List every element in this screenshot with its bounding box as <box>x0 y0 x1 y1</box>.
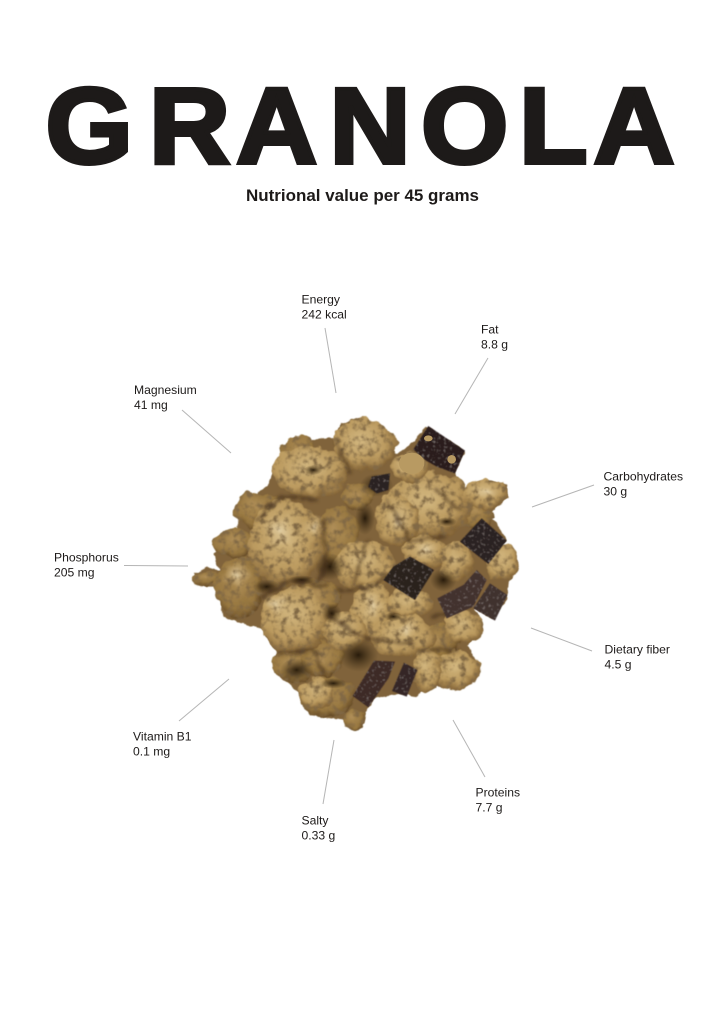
label: proteins: Proteins <box>476 786 520 800</box>
label: vitamin B1: Vitamin B1 <box>133 730 192 744</box>
label: proteins <box>453 720 520 814</box>
label: energy: 242 kcal <box>302 308 347 322</box>
title: GRANOLA <box>46 66 675 187</box>
label: phosphorus <box>54 550 188 580</box>
shadowed base of the cluster <box>193 419 518 730</box>
label: dietary fiber: 4.5 g <box>604 658 632 672</box>
label: salty: Salty <box>302 814 329 828</box>
label: energy: Energy <box>302 292 341 306</box>
label: energy <box>302 292 347 393</box>
chocolate pieces <box>353 426 507 707</box>
label: phosphorus: Phosphorus <box>54 550 119 564</box>
label: carbohydrates: 30 g <box>604 484 627 498</box>
label: magnesium <box>134 383 231 453</box>
label: dietary fiber: Dietary fiber <box>604 642 670 656</box>
label: salty: 0.33 g <box>302 828 335 842</box>
dark gaps between clumps <box>253 465 457 689</box>
label: proteins: 7.7 g <box>476 800 503 814</box>
label: salty <box>302 740 335 842</box>
label: fat <box>455 322 508 414</box>
illustration: granola cluster with chocolate pieces <box>191 419 520 730</box>
label: magnesium: Magnesium <box>134 383 197 397</box>
oats on top of the upper chocolate <box>399 435 456 474</box>
oat clumps <box>191 419 520 730</box>
label: carbohydrates <box>532 470 683 507</box>
label: fat: 8.8 g <box>481 338 508 352</box>
label: carbohydrates: Carbohydrates <box>604 470 683 484</box>
crevices between clumps <box>257 443 460 673</box>
label: vitamin B1 <box>133 679 229 758</box>
subtitle: Nutrional value per 45 grams <box>246 187 479 205</box>
label: fat: Fat <box>481 322 499 336</box>
label: phosphorus: 205 mg <box>54 566 94 580</box>
label: vitamin B1: 0.1 mg <box>133 744 170 758</box>
label: magnesium: 41 mg <box>134 398 168 412</box>
label: dietary fiber <box>531 628 670 672</box>
